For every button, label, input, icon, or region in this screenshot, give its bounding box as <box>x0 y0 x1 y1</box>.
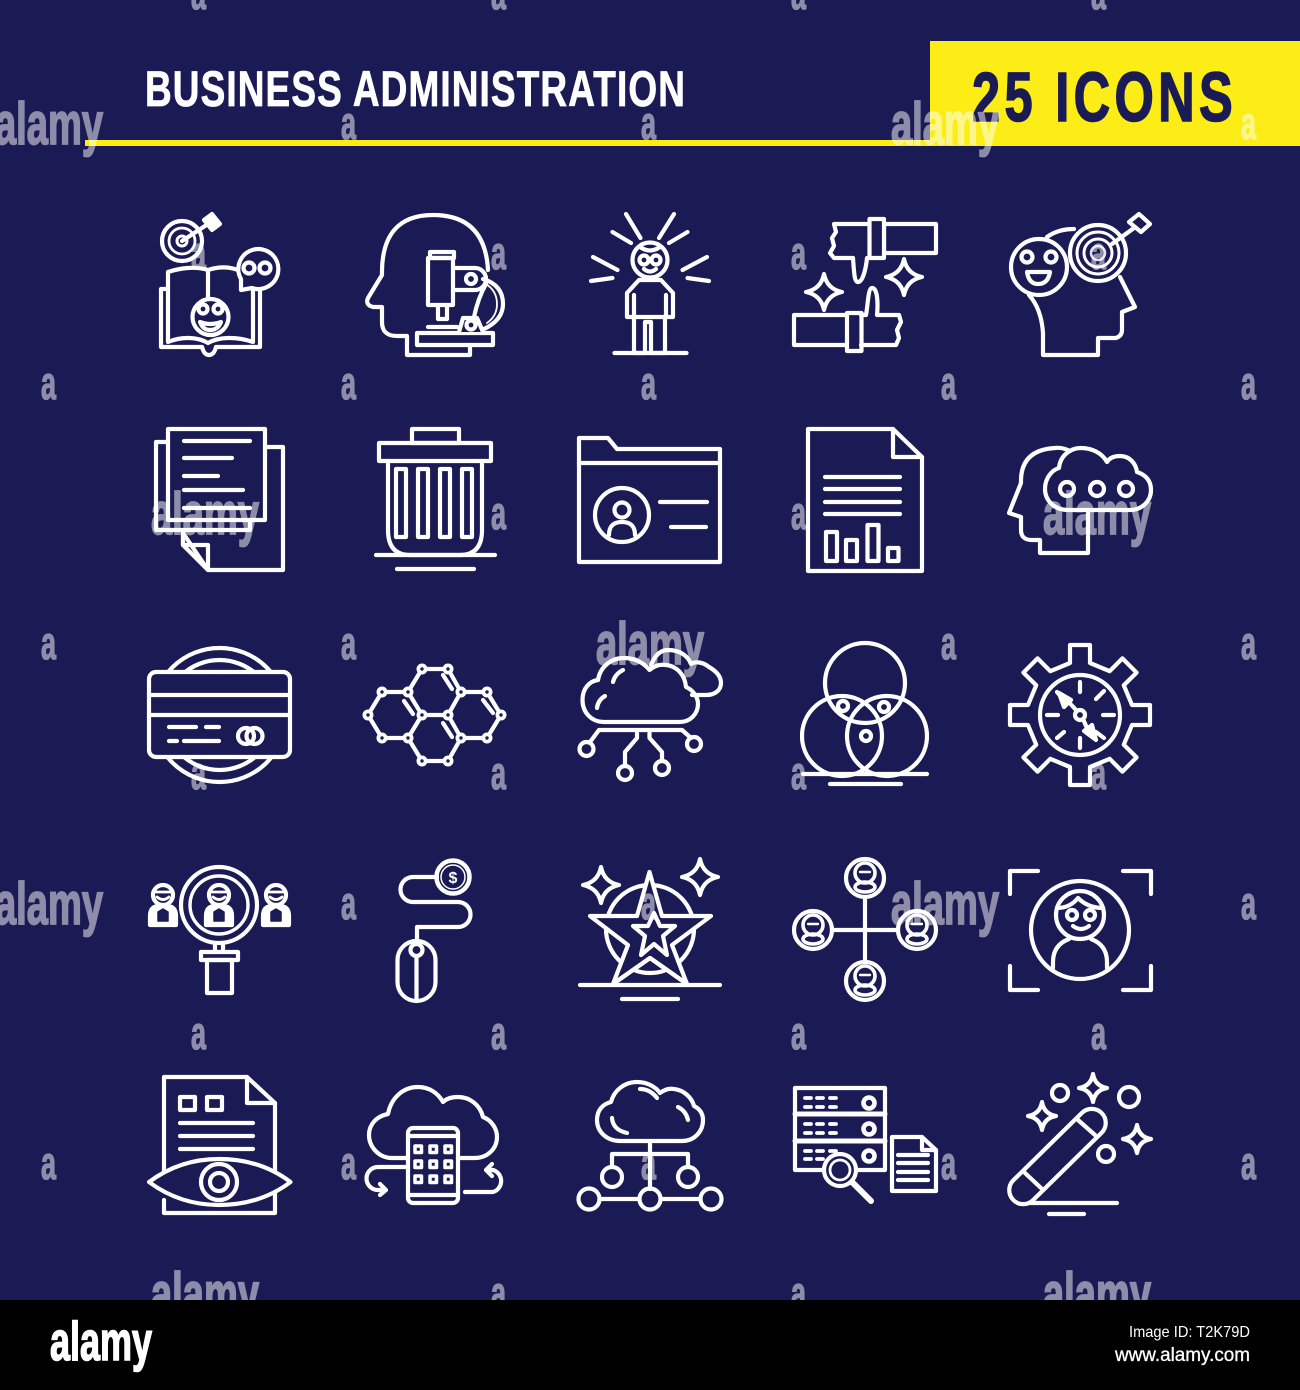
icon: cloud with smartphone <box>366 1087 501 1203</box>
watermark layer: a <box>791 227 806 279</box>
watermark layer: a <box>191 1007 206 1059</box>
watermark layer: a <box>491 227 506 279</box>
watermark layer: a <box>791 487 806 539</box>
watermark layer: a <box>491 1007 506 1059</box>
watermark layer: a <box>41 357 56 409</box>
watermark layer: a <box>791 1007 806 1059</box>
watermark layer: a <box>491 1267 506 1319</box>
watermark layer: a <box>791 747 806 799</box>
watermark layer: alamy <box>151 481 259 547</box>
watermark layer: a <box>1241 1137 1256 1189</box>
footer logo: alamy <box>50 1310 152 1372</box>
icon: book with target and speech bubble <box>161 214 278 355</box>
watermark layer: a <box>341 1137 356 1189</box>
node: top person <box>846 859 884 897</box>
watermark layer: alamy <box>151 1261 259 1327</box>
watermark layer: alamy <box>1043 1261 1151 1327</box>
watermark layer: alamy <box>891 871 999 937</box>
watermark layer: a <box>791 1267 806 1319</box>
watermark layer: a <box>491 487 506 539</box>
watermark layer: a <box>941 617 956 669</box>
watermark layer: a <box>191 747 206 799</box>
icon: person right <box>263 885 289 925</box>
icon: cloud hierarchy network <box>578 1082 722 1210</box>
website: www.alamy.com <box>1114 1345 1250 1366</box>
watermark layer: a <box>1091 1007 1106 1059</box>
watermark layer: a <box>641 1137 656 1189</box>
watermark layer: a <box>1091 227 1106 279</box>
icon: person left <box>150 885 176 925</box>
watermark layer: a <box>641 877 656 929</box>
icon: credit card <box>149 648 290 782</box>
watermark layer: a <box>941 1137 956 1189</box>
icon: face recognition frame <box>1010 871 1151 990</box>
watermark layer: a <box>341 357 356 409</box>
watermark layer: a <box>341 97 356 149</box>
header rule <box>85 140 930 146</box>
watermark layer: alamy <box>0 91 103 157</box>
icon: trash bin <box>376 429 495 569</box>
icon: people search magnifier <box>150 867 289 993</box>
watermark layer: alamy <box>596 611 704 677</box>
icon: document with eye <box>149 1077 290 1213</box>
icon: folder with profile <box>579 438 720 562</box>
watermark layer: a <box>641 357 656 409</box>
watermark layer: a <box>191 227 206 279</box>
watermark layer: alamy <box>891 91 999 157</box>
icon: head with microscope <box>367 215 503 355</box>
node: right person <box>898 911 936 949</box>
icon: cloud computing circuit <box>580 650 721 780</box>
icon: gear with clock <box>1010 645 1150 785</box>
icon: magic pencil with sparkles <box>1003 1074 1151 1214</box>
icon: venn diagram <box>802 643 927 784</box>
watermark layer: a <box>41 1137 56 1189</box>
icon: person center <box>206 885 232 925</box>
icon: star award <box>580 859 720 999</box>
icon grid <box>149 214 1151 1214</box>
icon: excited person with rays <box>591 214 709 353</box>
icon: document with bar chart <box>808 429 922 571</box>
watermark layer: a <box>341 617 356 669</box>
watermark layer: a <box>41 617 56 669</box>
yellow badge <box>930 41 1300 146</box>
watermark layer: a <box>1241 877 1256 929</box>
icon: stacked documents <box>156 429 283 570</box>
icon: people network <box>794 859 936 1000</box>
watermark layer: a <box>341 877 356 929</box>
icon: computer mouse with coin <box>398 860 470 1001</box>
icon: server with magnifier and document <box>795 1088 936 1201</box>
icon: head with smiley and target <box>1011 214 1150 355</box>
watermark layer: a <box>491 747 506 799</box>
node: left person <box>794 911 832 949</box>
watermark layer: alamy <box>1043 481 1151 547</box>
node: bottom person <box>846 962 884 1000</box>
watermark layer: a <box>1091 747 1106 799</box>
watermark layer: a <box>941 357 956 409</box>
watermark layer: a <box>641 97 656 149</box>
icon: thumbs down, thumbs up and sparkles <box>794 219 936 351</box>
title: BUSINESS ADMINISTRATION <box>145 61 686 117</box>
image id: Image ID: T2K79D <box>1129 1324 1250 1341</box>
watermark layer: a <box>1241 357 1256 409</box>
icon: hexagon network <box>364 665 505 765</box>
icon: head with cloud <box>1009 448 1151 553</box>
watermark layer: a <box>1241 617 1256 669</box>
watermark layer: a <box>1241 97 1256 149</box>
footer bar <box>0 1300 1300 1390</box>
watermark layer: alamy <box>0 871 103 937</box>
icon: computer mouse with coin: $ <box>449 870 458 887</box>
